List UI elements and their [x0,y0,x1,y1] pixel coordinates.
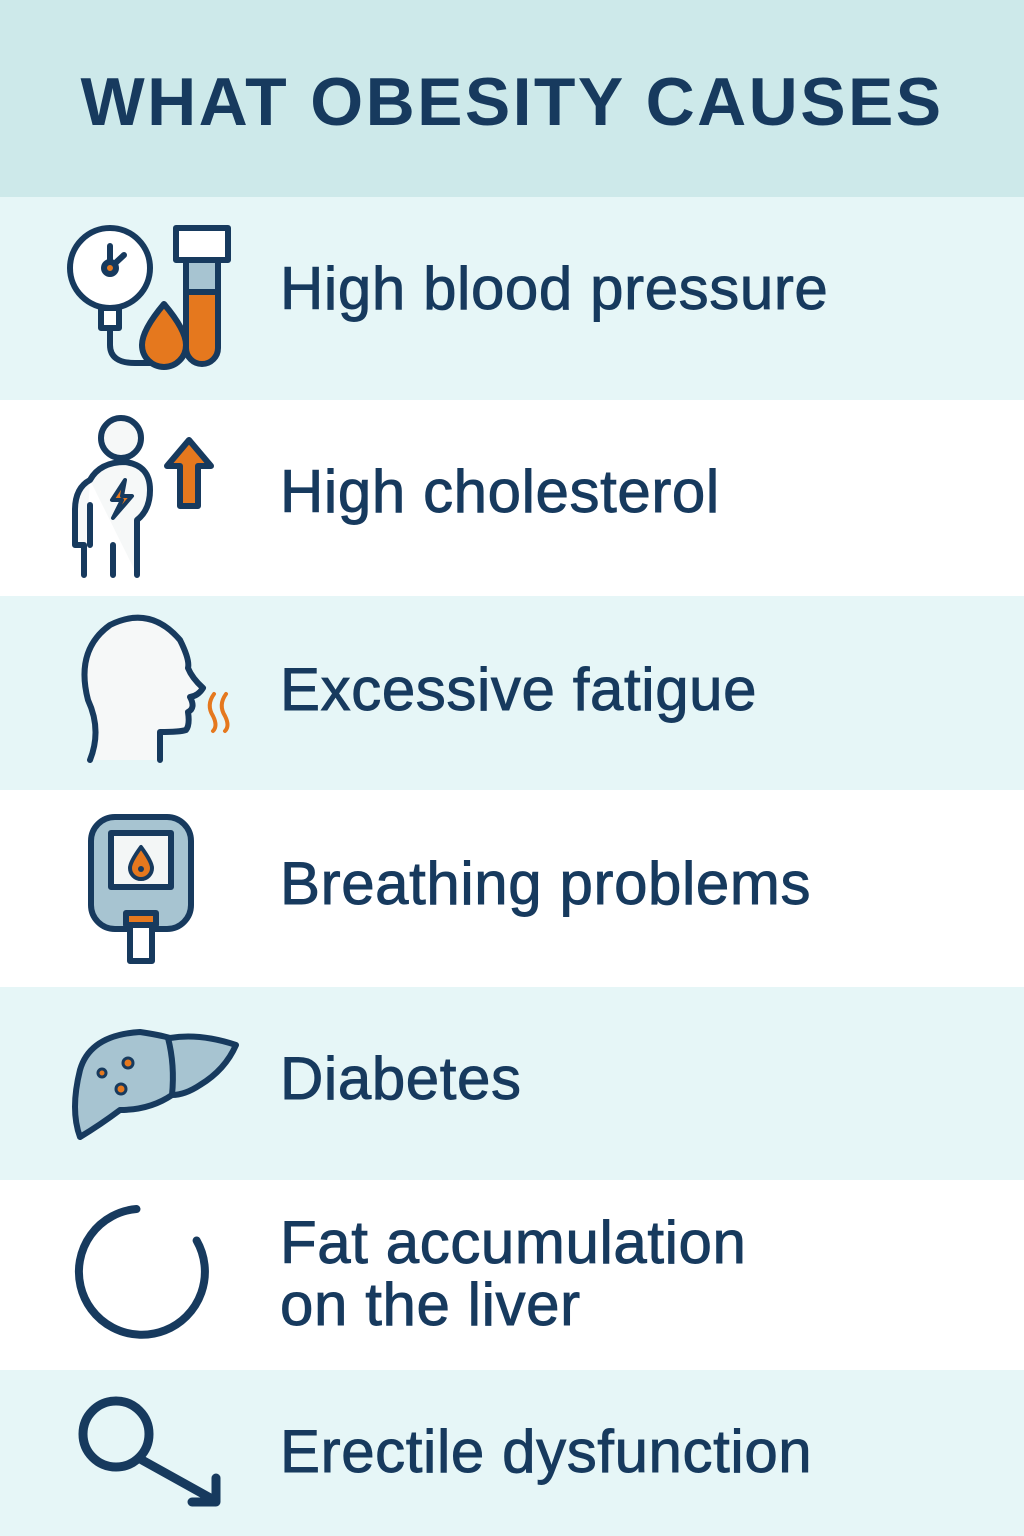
row: breathing problems [0,790,1024,987]
icon: male symbol magnifier [78,1396,220,1506]
label: Diabetes [280,1045,522,1112]
header [0,0,1024,197]
icon: liver [72,1029,239,1140]
row: diabetes [0,987,1024,1180]
icon: person with up arrow [72,415,214,578]
label: Fat accumulation [280,1209,746,1276]
row: excessive fatigue [0,596,1024,790]
label: Breathing problems [280,850,811,917]
label: High cholesterol [280,458,720,525]
icon: glucose meter [88,814,194,964]
row: erectile dysfunction [0,1370,1024,1536]
row: high cholesterol [0,400,1024,596]
title: WHAT OBESITY CAUSES [81,64,943,140]
icon: open ring [74,1205,209,1339]
icon: blood pressure gauge and test tube [67,225,231,370]
row: high blood pressure [0,197,1024,400]
label [280,1209,746,1338]
label: Erectile dysfunction [280,1418,812,1485]
label: Excessive fatigue [280,656,757,723]
label: High blood pressure [280,255,828,322]
label: on the liver [280,1271,581,1338]
row: fat accumulation on the liver [0,1180,1024,1370]
icon: head with breath [81,614,230,763]
